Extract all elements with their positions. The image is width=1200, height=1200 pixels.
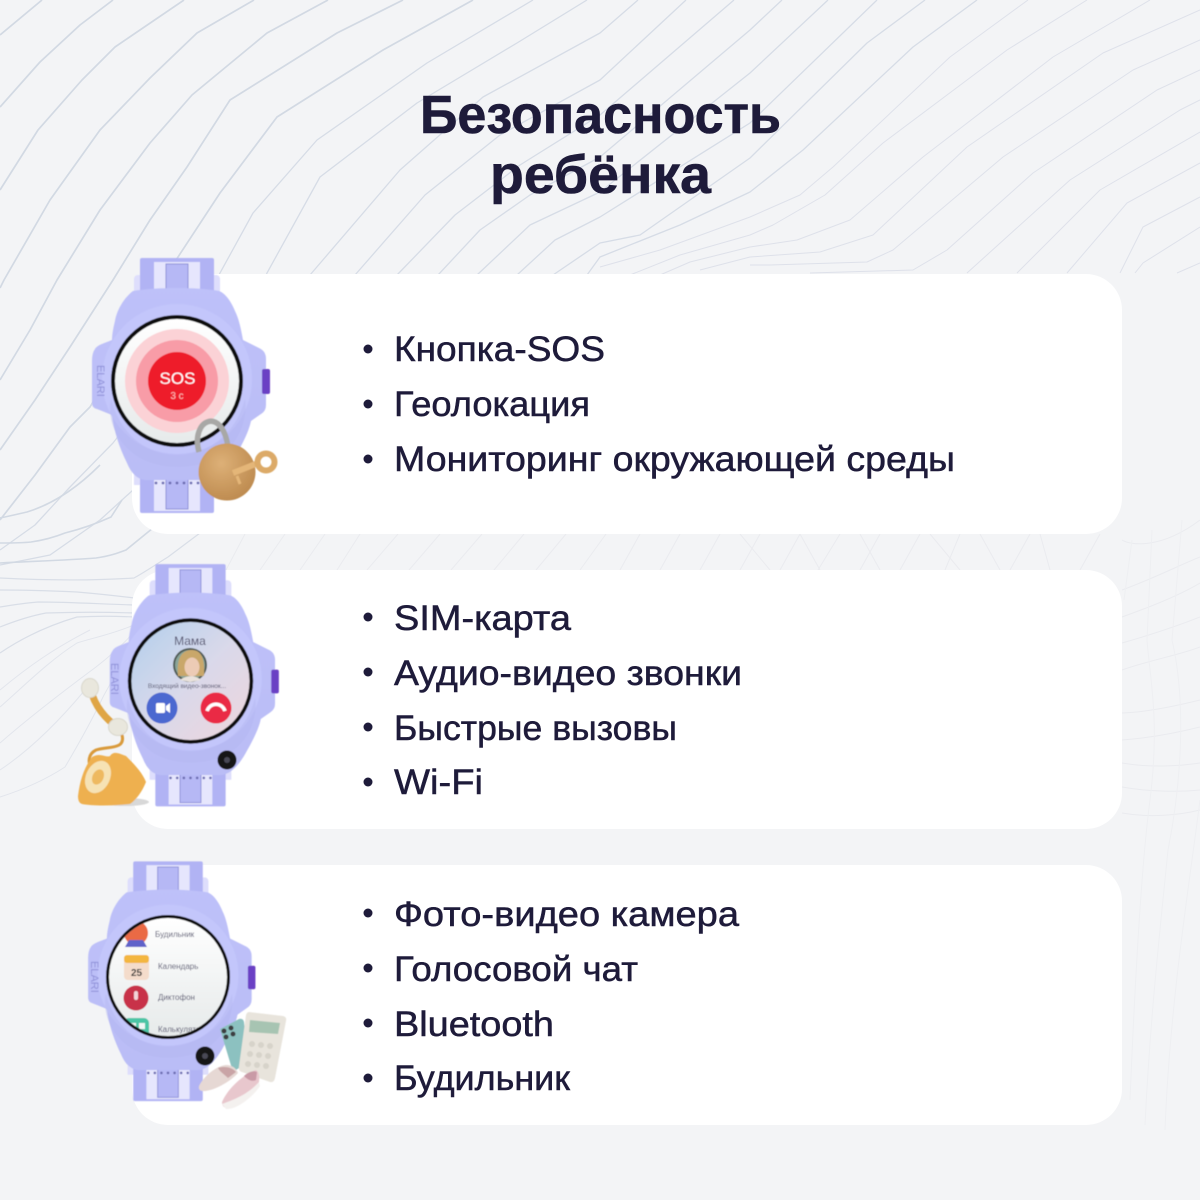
feature list: calls: Wi-Fi	[394, 763, 483, 802]
app: calendar: Календарь	[158, 962, 198, 971]
feature list: media: Будильник	[394, 1059, 571, 1098]
feature list: calls: Быстрые вызовы	[394, 709, 677, 748]
title: ребёнка	[490, 145, 712, 205]
app: calendar	[124, 955, 198, 980]
camera lens	[218, 750, 236, 770]
video call button	[146, 692, 178, 724]
feature list: calls: SIM-карта	[394, 599, 572, 638]
camera lens	[196, 1046, 214, 1066]
icon: watch with SOS screen and padlock: SOS	[160, 369, 195, 388]
panel: SOS and location	[132, 274, 1122, 534]
icon: watch with SOS screen and padlock	[92, 258, 274, 513]
feature list: calls: Аудио-видео звонки	[394, 654, 742, 693]
app: calendar: 25	[131, 968, 142, 979]
feature list: safety: Геолокация	[394, 385, 590, 424]
decline call button	[200, 692, 232, 724]
icon: rotary phone	[78, 678, 149, 806]
icon: watch with apps screen and accessories	[88, 861, 286, 1109]
feature list: safety	[364, 330, 955, 479]
panel: calls and connectivity	[132, 570, 1122, 829]
avatar	[173, 648, 207, 682]
icon: watch with apps screen and accessories: ELARI	[88, 961, 100, 993]
icon: padlock and key	[197, 421, 274, 500]
feature list: media: Bluetooth	[394, 1005, 554, 1044]
app: calculator: Калькулятор	[158, 1025, 205, 1034]
feature list: media	[364, 895, 740, 1098]
panel: media and tools	[132, 865, 1122, 1125]
feature list: media: Фото-видео камера	[394, 895, 740, 934]
icon: phone, calculator and sneakers	[199, 1012, 286, 1109]
feature list: safety: Кнопка-SOS	[394, 330, 605, 369]
icon: watch with incoming call screen and rotary phone	[78, 564, 279, 806]
feature list: media: Голосовой чат	[394, 950, 638, 989]
feature list: safety: Мониторинг окружающей среды	[394, 440, 955, 479]
app: alarm: Будильник	[155, 930, 195, 939]
title	[420, 85, 781, 205]
app: recorder: Диктофон	[158, 993, 195, 1002]
icon: watch with incoming call screen and rotary phone: Входящий видео-звонок...	[148, 682, 226, 690]
icon: watch with incoming call screen and rotary phone: ELARI	[108, 663, 120, 695]
feature list: calls	[364, 599, 742, 802]
icon: watch with SOS screen and padlock: ELARI	[94, 365, 106, 397]
title: Безопасность	[420, 85, 781, 145]
icon: watch with incoming call screen and rotary phone: Мама	[174, 634, 206, 648]
icon: watch with SOS screen and padlock: 3 с	[170, 391, 184, 402]
